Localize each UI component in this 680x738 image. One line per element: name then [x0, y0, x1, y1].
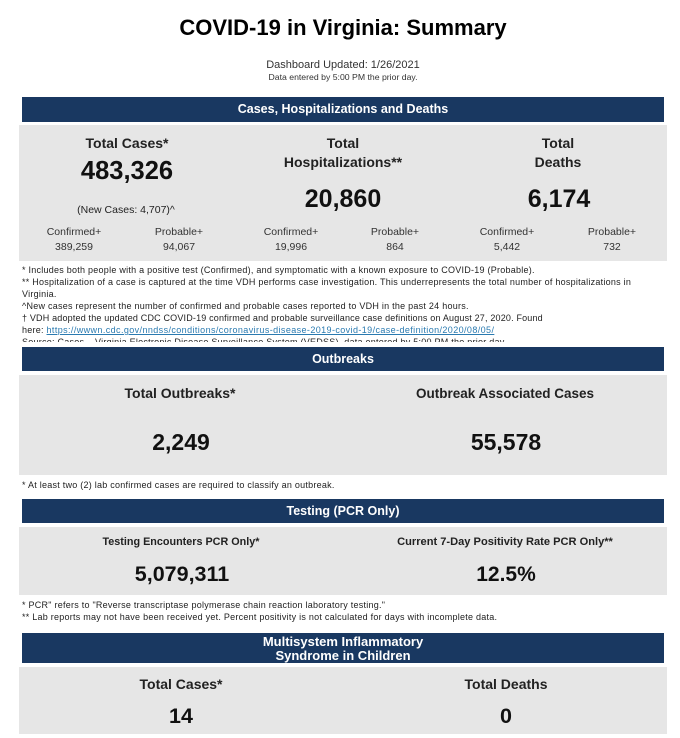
- label: MIS-C total cases: Total Cases*: [140, 676, 222, 692]
- footnote: outbreaks: * At least two (2) lab confirmed cases are required to classify an outbreak.: [22, 480, 335, 490]
- label: testing encounters: Testing Encounters PCR Only*: [102, 536, 259, 548]
- hospitalizations probable: [371, 226, 419, 252]
- deaths probable: [588, 226, 636, 252]
- section header: testing: [22, 499, 664, 523]
- label: total deaths: Deaths: [535, 154, 581, 170]
- title: COVID-19 in Virginia: Summary: [179, 15, 507, 40]
- label: total deaths: [535, 135, 581, 170]
- hospitalizations probable: Probable+: [371, 226, 419, 238]
- deaths confirmed: Confirmed+: [480, 226, 534, 238]
- section header: multisystem inflammatory syndrome: Multisystem Inflammatory: [263, 634, 423, 649]
- total cases probable: Probable+: [155, 226, 203, 238]
- label: total outbreaks: Total Outbreaks*: [124, 385, 236, 401]
- deaths confirmed: [480, 226, 534, 252]
- label: MIS-C total deaths: Total Deaths: [464, 676, 547, 692]
- number: total outbreaks: 2,249: [152, 429, 210, 455]
- label: total hospitalizations: Total: [327, 135, 359, 151]
- number: total cases: 483,326: [81, 157, 173, 185]
- total cases probable: [155, 226, 203, 252]
- hospitalizations confirmed: 19,996: [275, 240, 307, 252]
- footnotes: testing: * PCR" refers to "Reverse transcriptase polymerase chain reaction laboratory testing.": [22, 600, 385, 610]
- total cases confirmed: 389,259: [55, 240, 93, 252]
- footnotes: cases: ** Hospitalization of a case is captured at the time VDH performs case investigation. This underrepresents the total number of hospitalizations in: [22, 277, 631, 287]
- total cases confirmed: [47, 226, 101, 252]
- number: total hospitalizations: 20,860: [305, 185, 381, 213]
- total cases probable: 94,067: [163, 240, 195, 252]
- number: testing encounters: 5,079,311: [135, 562, 229, 586]
- hospitalizations confirmed: Confirmed+: [264, 226, 318, 238]
- dashboard updated date: Dashboard Updated: 1/26/2021: [266, 59, 420, 71]
- total cases confirmed: Confirmed+: [47, 226, 101, 238]
- panel: outbreaks: [19, 375, 667, 475]
- label: total hospitalizations: [284, 135, 402, 170]
- number: MIS-C total cases: 14: [169, 704, 193, 728]
- new cases: (New Cases: 4,707)^: [77, 204, 175, 216]
- label: total hospitalizations: Hospitalizations**: [284, 154, 402, 170]
- deaths probable: 732: [603, 240, 621, 252]
- section header: cases: Cases, Hospitalizations and Deaths: [238, 102, 448, 116]
- footnotes: cases: * Includes both people with a positive test (Confirmed), and symptomatic with a known exposure to COVID-19 (Probable).: [22, 265, 535, 275]
- deaths confirmed: 5,442: [494, 240, 520, 252]
- label: outbreak associated cases: Outbreak Associated Cases: [416, 386, 594, 401]
- footnotes: testing: ** Lab reports may not have been received yet. Percent positivity is not calculated for days with incomplete data.: [22, 612, 497, 622]
- section header: multisystem inflammatory syndrome: Syndrome in Children: [275, 648, 411, 663]
- footnotes: cases: ^New cases represent the number of confirmed and probable cases reported to VDH in the past 24 hours.: [22, 301, 469, 311]
- number: total deaths: 6,174: [528, 185, 590, 213]
- number: positivity rate: 12.5%: [476, 563, 536, 586]
- footnotes: cases: [22, 265, 631, 342]
- footnotes: testing: [22, 600, 497, 622]
- deaths probable: Probable+: [588, 226, 636, 238]
- label: total cases: Total Cases*: [86, 135, 168, 151]
- hospitalizations confirmed: [264, 226, 318, 252]
- label: positivity rate: Current 7-Day Positivity Rate PCR Only**: [397, 536, 613, 548]
- panel: cases, hospitalizations and deaths: [19, 125, 667, 261]
- data entry note: Data entered by 5:00 PM the prior day.: [268, 72, 418, 82]
- number: outbreak associated cases: 55,578: [471, 429, 541, 455]
- footnotes: cases: † VDH adopted the updated CDC COVID-19 confirmed and probable surveillance case definitions on August 27, 2020. Found: [22, 313, 543, 323]
- number: MIS-C total deaths: 0: [500, 704, 512, 728]
- section header: multisystem inflammatory syndrome: [22, 633, 664, 663]
- section header: outbreaks: Outbreaks: [312, 352, 374, 366]
- section header: testing: Testing (PCR Only): [287, 504, 399, 518]
- panel: testing: [19, 527, 667, 595]
- footnotes: cases: here: https://wwwn.cdc.gov/nndss/conditions/coronavirus-disease-2019-covid-19/case-definition/2020/08/05/: [22, 325, 494, 335]
- label: total deaths: Total: [542, 135, 574, 151]
- section header: outbreaks: [22, 347, 664, 371]
- footnotes: cases: Virginia.: [22, 289, 57, 299]
- hospitalizations probable: 864: [386, 240, 404, 252]
- panel: multisystem inflammatory syndrome: [19, 667, 667, 734]
- section header: cases: [22, 97, 664, 122]
